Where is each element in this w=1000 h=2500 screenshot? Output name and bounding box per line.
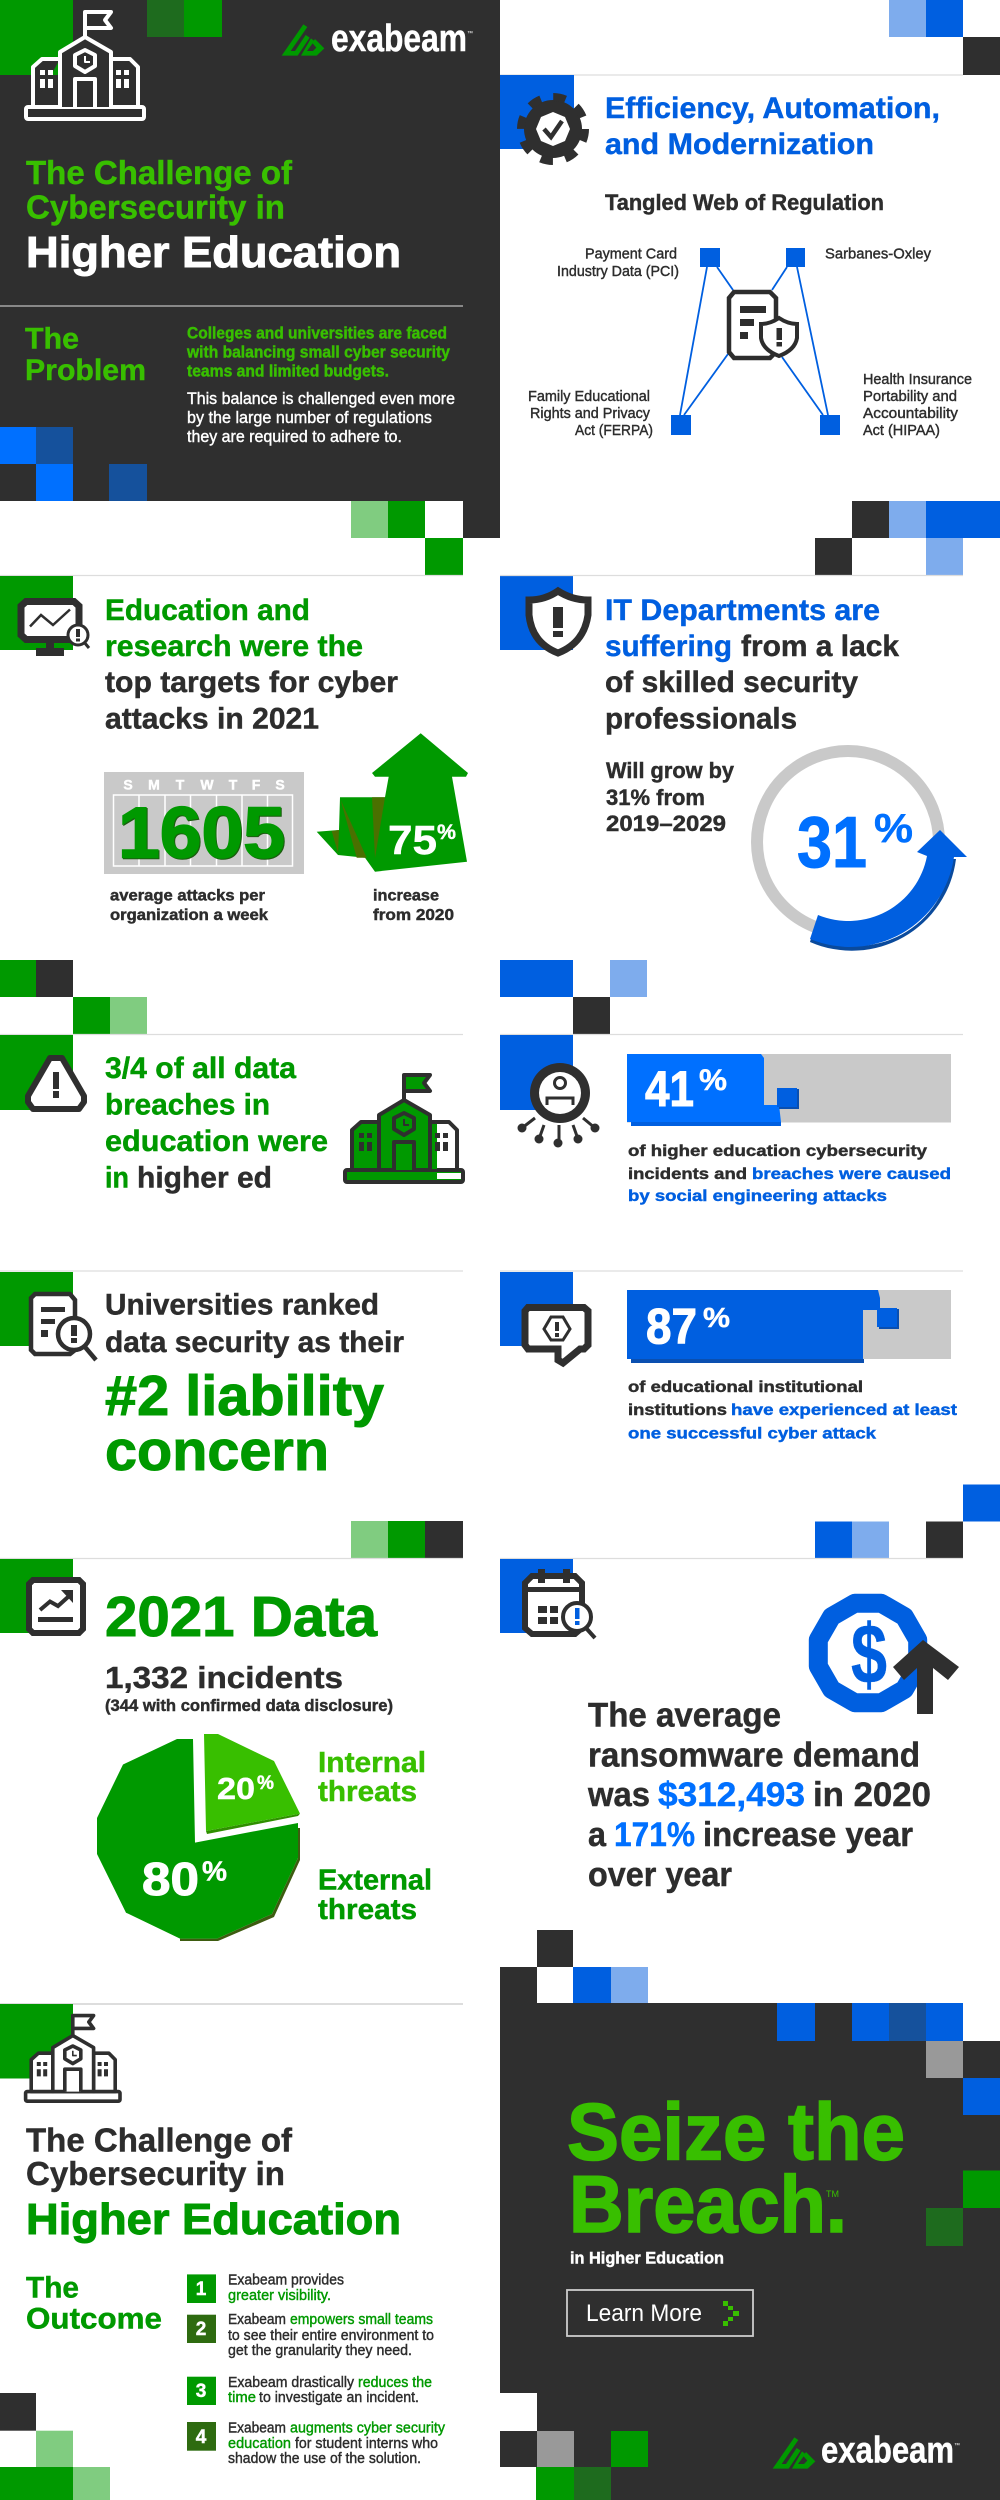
icon: origami arrow 75 percent: % <box>437 821 456 844</box>
bar: 87 percent: 87 <box>646 1298 697 1354</box>
list item 1: 1 <box>196 2279 207 2300</box>
heading: 2021 data: 2021 Data <box>105 1585 378 1649</box>
heading: the outcome: Outcome <box>26 2302 162 2336</box>
list item 4 <box>187 2420 446 2467</box>
legend: external threats <box>318 1864 432 1926</box>
list item 4: augments cyber security <box>290 2420 446 2436</box>
label: FERPA <box>528 389 653 439</box>
heading: efficiency: Efficiency, Automation, <box>605 92 940 125</box>
list item 3: 3 <box>196 2381 206 2402</box>
headline: seize the breach: Breach. <box>569 2160 847 2250</box>
icon: growth chart <box>29 1580 83 1633</box>
button: learn more <box>567 2290 753 2336</box>
bar: 41 percent <box>627 1054 951 1126</box>
title: Cybersecurity in <box>26 190 285 226</box>
logo: exabeam: ™ <box>467 30 473 37</box>
text: ransomware demand: $312,493 <box>658 1776 805 1814</box>
text: social engineering: breaches were caused <box>752 1166 951 1183</box>
stat: 1605 on calendar: T <box>176 776 185 792</box>
text: incidents: (344 with confirmed data disclosure) <box>105 1697 393 1715</box>
list item 2: get the granularity they need. <box>228 2343 412 2359</box>
logo: exabeam footer: ™ <box>954 2442 960 2449</box>
list item 3: Exabeam drastically <box>228 2375 355 2391</box>
chart: 31 percent ring: 31 <box>797 803 867 883</box>
list item 1: greater visibility. <box>228 2288 331 2304</box>
label: PCI: Industry Data (PCI) <box>557 264 679 280</box>
heading: the outcome: The <box>26 2272 79 2304</box>
heading: the problem <box>25 322 146 387</box>
text: will grow: Will grow by <box>606 758 735 783</box>
chart: pie of threats: 20 <box>217 1771 255 1806</box>
label: PCI <box>557 246 679 280</box>
text: ransomware demand: ransomware demand <box>588 1737 920 1775</box>
list item 4: shadow the use of the solution. <box>228 2451 421 2467</box>
title: Higher Education <box>26 228 401 277</box>
diagram: tangled web of regulation <box>671 248 840 435</box>
panel: ransomware demand <box>500 1484 1000 1894</box>
heading: universities ranked: Universities ranked <box>105 1288 379 1322</box>
bar: 41 percent: % <box>699 1064 727 1097</box>
text: ransomware demand: was <box>587 1776 650 1814</box>
heading: top targets: top targets for cyber <box>105 666 398 699</box>
bar: 41 percent: 41 <box>645 1061 694 1117</box>
heading: top targets: attacks in 2021 <box>105 702 319 736</box>
text: problem statement <box>186 324 455 446</box>
chart: 31 percent ring <box>757 751 967 951</box>
title: challenge: Cybersecurity in <box>26 2156 285 2193</box>
stat: 1605 on calendar: M <box>148 776 160 792</box>
heading: it departments: IT Departments are <box>605 594 880 627</box>
button: learn more: Learn More <box>586 2300 702 2327</box>
list item 1: Exabeam provides <box>228 2272 344 2288</box>
icon: speech bubble warning <box>525 1308 588 1363</box>
label: FERPA: Rights and Privacy <box>530 406 651 422</box>
list item 4: Exabeam <box>228 2420 286 2436</box>
text: problem statement: by the large number of regulations <box>187 409 432 427</box>
panel: 41 percent social engineering <box>500 960 963 1205</box>
icon: school outline <box>26 2016 120 2101</box>
panel: efficiency, automation and modernization <box>500 0 1000 575</box>
text: ransomware demand: increase year <box>703 1816 913 1854</box>
callout: liability concern <box>105 1364 384 1483</box>
list item 2: Exabeam <box>228 2312 286 2328</box>
heading: three quarters: 3/4 of all data <box>105 1052 296 1085</box>
text: problem statement: This balance is challenged even more <box>187 390 455 408</box>
panel: 87 percent <box>500 1271 963 1442</box>
heading: three quarters <box>105 1052 328 1195</box>
panel: three quarters of breaches <box>0 960 463 1195</box>
stat: 1605 on calendar: 1605 <box>118 794 285 874</box>
label: FERPA: Act (FERPA) <box>575 423 653 439</box>
icon: school <box>26 12 144 119</box>
heading: universities ranked: data security as their <box>105 1326 405 1359</box>
label: HIPAA: Accountability <box>863 406 959 422</box>
panel: the outcome <box>0 2004 463 2500</box>
list item 4: for student interns who <box>295 2436 438 2452</box>
icon: monitor with magnifier <box>21 602 89 656</box>
heading: top targets <box>105 594 398 736</box>
heading: it departments: suffering <box>605 630 732 663</box>
chart: pie of threats: % <box>202 1856 227 1886</box>
heading: it departments: from a lack <box>741 630 899 663</box>
legend: internal threats: threats <box>318 1776 417 1808</box>
icon: gear with check <box>521 97 585 161</box>
legend: external threats: threats <box>318 1894 417 1926</box>
caption: attacks per week: average attacks per <box>110 888 265 904</box>
legend: internal threats: Internal <box>318 1747 426 1779</box>
callout: liability concern: #2 liability <box>105 1364 384 1428</box>
text: incidents: 1,332 incidents <box>105 1660 343 1695</box>
heading: the outcome <box>26 2272 162 2336</box>
title: challenge <box>26 2122 401 2244</box>
panel: it departments <box>500 576 967 951</box>
list item 2: to see their entire environment to <box>228 2328 434 2344</box>
title: challenge: The Challenge of <box>26 2122 293 2160</box>
logo: exabeam: exabeam <box>331 18 467 60</box>
text: incidents <box>105 1660 393 1715</box>
list item 4: education <box>228 2436 291 2452</box>
caption: increase from 2020: from 2020 <box>373 907 454 924</box>
list item 3 <box>187 2375 432 2406</box>
text: will grow <box>606 758 735 836</box>
stat: 1605 on calendar: S <box>275 776 285 792</box>
text: successful cyber attack: have experienced at least <box>731 1402 958 1419</box>
icon: person network <box>518 1063 600 1148</box>
text: social engineering: by social engineering attacks <box>628 1188 887 1205</box>
panel: seize the breach <box>500 1930 1000 2500</box>
list item 1 <box>187 2272 344 2304</box>
chart: 31 percent ring: % <box>874 805 913 851</box>
caption: increase from 2020 <box>373 888 454 924</box>
logo: exabeam <box>282 18 473 60</box>
headline: seize the breach: Seize the <box>567 2088 905 2178</box>
text: ransomware demand: over year <box>588 1856 732 1894</box>
icon: calendar with magnifier <box>525 1569 595 1638</box>
title: The Challenge of <box>26 155 293 192</box>
text: successful cyber attack: one successful cyber attack <box>628 1426 876 1442</box>
text: will grow: 31% from <box>606 785 705 810</box>
label: HIPAA: Portability and <box>863 389 957 405</box>
heading: the problem: The <box>25 322 79 356</box>
heading: it departments: professionals <box>605 702 797 736</box>
heading: it departments <box>605 594 899 736</box>
heading: efficiency <box>605 92 940 161</box>
stat: 1605 on calendar: T <box>229 776 238 792</box>
label: PCI: Payment Card <box>585 246 677 262</box>
title <box>26 155 401 277</box>
caption: attacks per week: organization a week <box>110 907 268 924</box>
heading: three quarters: in <box>105 1162 129 1195</box>
headline: seize the breach <box>567 2088 905 2250</box>
heading: three quarters: higher ed <box>137 1162 272 1195</box>
list item 3: time <box>228 2390 256 2406</box>
headline: seize the breach: TM <box>826 2189 839 2199</box>
chart: pie of threats: % <box>257 1773 274 1794</box>
callout: liability concern: concern <box>105 1419 329 1483</box>
stat: 1605 on calendar: W <box>200 776 214 792</box>
text: ransomware demand <box>587 1696 931 1894</box>
stat: 1605 on calendar <box>104 772 304 874</box>
text: ransomware demand: a <box>588 1816 607 1854</box>
subheading: tangled web: Tangled Web of Regulation <box>605 190 884 215</box>
heading: efficiency: and Modernization <box>605 128 874 161</box>
legend: internal threats <box>318 1747 426 1808</box>
list item 3: reduces the <box>358 2375 432 2391</box>
text: successful cyber attack: of educational institutional <box>628 1379 863 1396</box>
text: problem statement: with balancing small cyber security <box>186 344 451 362</box>
icon: dollar with up arrow: $ <box>851 1607 887 1701</box>
stat: 1605 on calendar: S <box>123 776 133 792</box>
list item 3: to investigate an incident. <box>259 2390 419 2406</box>
text: ransomware demand: The average <box>588 1696 781 1734</box>
heading: top targets: Education and <box>105 594 310 627</box>
label: HIPAA: Health Insurance <box>863 372 972 388</box>
text: social engineering <box>628 1143 951 1205</box>
icon: shield warning <box>529 591 588 653</box>
text: problem statement: teams and limited budgets. <box>187 362 389 380</box>
label: Sarbanes-Oxley: Sarbanes-Oxley <box>825 246 932 262</box>
text: successful cyber attack <box>628 1379 958 1442</box>
icon: green school <box>345 1075 463 1182</box>
bar: 87 percent <box>627 1290 951 1363</box>
list item 2: empowers small teams <box>290 2312 433 2328</box>
icon: document with magnifier <box>31 1294 96 1360</box>
label: HIPAA <box>863 372 972 439</box>
heading: three quarters: education were <box>105 1125 328 1158</box>
list item 2: 2 <box>196 2319 206 2340</box>
chart: pie of threats <box>97 1734 300 1941</box>
text: problem statement: they are required to adhere to. <box>187 428 402 446</box>
panel: number 2 liability <box>0 1271 463 1483</box>
panel: the problem <box>0 0 500 575</box>
icon: origami arrow 75 percent: 75 <box>388 817 437 863</box>
heading: it departments: of skilled security <box>605 666 858 699</box>
bar: 87 percent: % <box>703 1302 730 1333</box>
text: ransomware demand: 171% <box>614 1816 695 1854</box>
logo: exabeam footer <box>773 2430 960 2471</box>
list item 4: 4 <box>196 2427 207 2448</box>
heading: three quarters: breaches in <box>105 1089 270 1122</box>
legend: external threats: External <box>318 1864 432 1896</box>
label: HIPAA: Act (HIPAA) <box>863 423 940 439</box>
text: social engineering: of higher education cybersecurity <box>628 1143 927 1160</box>
list item 2 <box>187 2312 434 2359</box>
chart: pie of threats: 80 <box>142 1853 199 1905</box>
text: ransomware demand: in 2020 <box>813 1776 931 1814</box>
icon: dollar with up arrow <box>818 1603 959 1714</box>
panel: education and research top targets <box>0 576 468 924</box>
caption: increase from 2020: increase <box>373 888 439 904</box>
text: successful cyber attack: institutions <box>628 1402 727 1419</box>
panel: 2021 data <box>0 1521 463 1941</box>
heading: the problem: Problem <box>25 354 146 387</box>
text: will grow: 2019–2029 <box>606 811 726 836</box>
stat: 1605 on calendar: F <box>252 776 261 792</box>
caption: attacks per week <box>110 888 268 924</box>
title: challenge: Higher Education <box>26 2195 401 2244</box>
icon: warning triangle <box>28 1058 84 1109</box>
heading: universities ranked <box>105 1288 405 1359</box>
text: social engineering: incidents and <box>628 1166 747 1183</box>
subheading: in higher education: in Higher Education <box>570 2249 724 2268</box>
heading: top targets: research were the <box>105 630 363 663</box>
text: problem statement: Colleges and universities are faced <box>187 324 447 342</box>
logo: exabeam footer: exabeam <box>821 2430 954 2471</box>
label: FERPA: Family Educational <box>528 389 650 405</box>
icon: origami arrow 75 percent <box>317 733 468 872</box>
